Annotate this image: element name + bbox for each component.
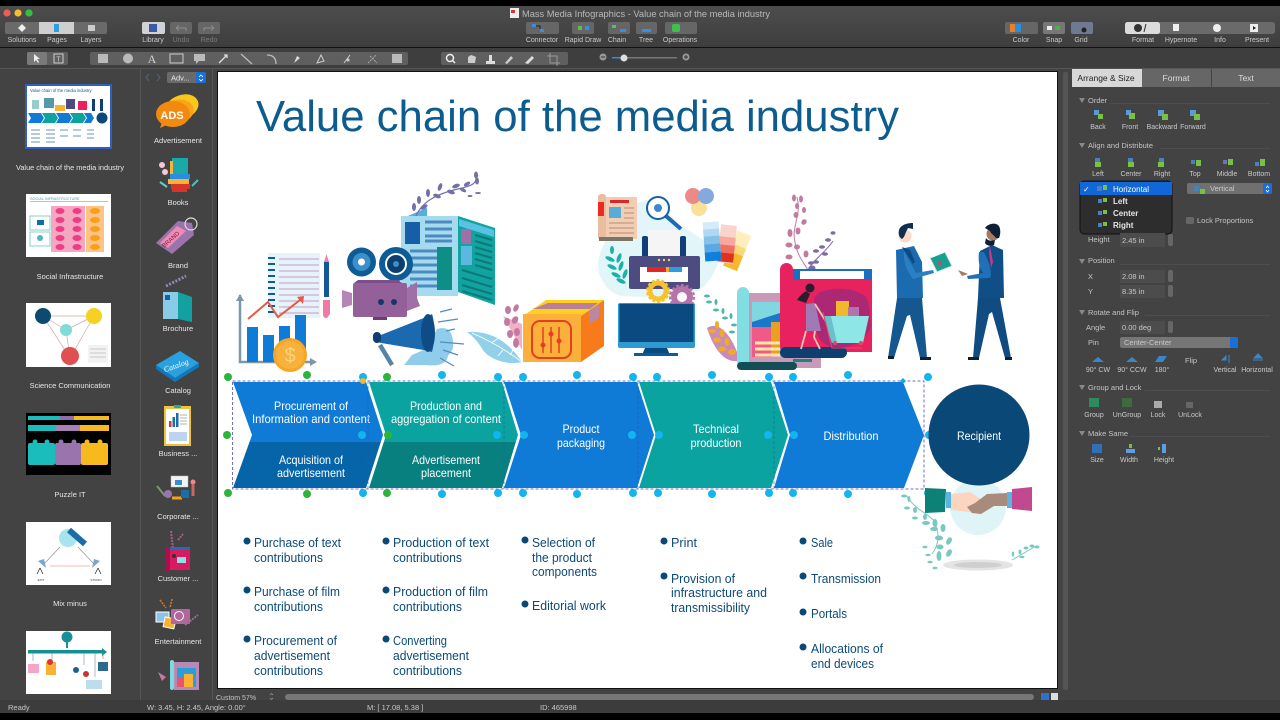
chevron: distribution: [774, 382, 924, 488]
connector and drawing mode buttons: Connector: [526, 37, 559, 44]
section: group and lock: Group: [1084, 412, 1104, 419]
illustration: two businessmen exchanging catalog: [888, 223, 1012, 360]
icon: brand: BRAND: [162, 231, 182, 250]
label: social infrastructure: Social Infrastructure: [37, 272, 103, 281]
segmented control: format hypernote info present: Info: [1214, 37, 1226, 44]
section: make same: Make Same: [1088, 429, 1128, 438]
thumbnail: value chain: [25, 84, 112, 149]
segmented control: format hypernote info present: Format: [1132, 37, 1154, 44]
connector and drawing mode buttons: Rapid Draw: [565, 37, 602, 44]
lock proportions: Lock Proportions: [1197, 216, 1254, 225]
horizontal distribute dropdown: Horizontal: [1113, 185, 1149, 194]
handshake illustration: [901, 479, 1040, 570]
section: rotate and flip: Vertical: [1214, 367, 1237, 374]
section: rotate and flip: Center-Center: [1124, 338, 1172, 347]
value chain group: [223, 371, 933, 498]
thumbnail: timeline: [26, 631, 111, 694]
section: make same: Width: [1120, 457, 1138, 464]
bullet list: procurement column: advertisement: [254, 649, 331, 663]
segmented control: format hypernote info present: Hypernote: [1165, 37, 1197, 44]
bullet list: procurement column: Procurement of: [254, 634, 337, 648]
document scrollbars: [216, 72, 1068, 702]
connector and drawing mode buttons: Operations: [663, 37, 698, 44]
cart: [823, 301, 869, 348]
panel: pages thumbnails: [0, 69, 141, 700]
document title: Mass Media Infographics - Value chain of the media industry: [522, 9, 770, 20]
sprigs above: [786, 194, 809, 272]
illustration: printer, monitor, colour swatches: [598, 188, 751, 356]
color snap grid buttons: Color: [1013, 37, 1030, 44]
horizontal distribute dropdown: Center: [1113, 209, 1138, 218]
section: group and lock: UnLock: [1178, 412, 1202, 419]
selection frame and handles: [223, 371, 933, 498]
thumbnail: mix minus: STUDIO: [90, 578, 102, 582]
colour circles: [685, 188, 714, 216]
label: mix minus: Mix minus: [53, 599, 87, 608]
small plant: [704, 294, 737, 361]
bullet list: procurement column: Purchase of text: [254, 536, 342, 550]
horizontal distribute dropdown: Left: [1113, 197, 1128, 206]
section: rotate and flip: 90° CCW: [1117, 366, 1147, 374]
status bar: [0, 700, 1280, 713]
color snap grid buttons: Grid: [1074, 37, 1088, 44]
section: order: Front: [1122, 124, 1138, 131]
section: order: Backward: [1147, 124, 1177, 131]
chevron: technical production: production: [690, 436, 742, 450]
library undo redo buttons: Undo: [173, 37, 189, 44]
bullet list: procurement column: contributions: [254, 664, 323, 678]
application title bar and main toolbar: [0, 6, 1280, 69]
section: align and distribute: Bottom: [1248, 171, 1270, 178]
section: group and lock: Group and Lock: [1088, 383, 1142, 392]
chevron: production and advertisement placement: aggregation of content: [391, 412, 502, 426]
printer: [629, 230, 700, 289]
section: position: X: [1088, 272, 1093, 281]
bullet list: production column: [382, 536, 490, 678]
chevron: procurement and acquisition: advertisement: [277, 466, 346, 480]
thumbnail: social infrastructure: [26, 194, 111, 257]
height field: Height: [1088, 235, 1111, 244]
section: position: Y: [1088, 287, 1093, 296]
connector and drawing mode buttons: [526, 22, 698, 44]
section: align and distribute: Align and Distribute: [1088, 141, 1153, 150]
icon: advertisement: ADS: [160, 110, 184, 122]
sprig: [412, 172, 481, 216]
bullet list: distribution column: end devices: [811, 657, 874, 671]
section: order: Forward: [1180, 124, 1206, 131]
magnifier: [647, 197, 681, 229]
drawing tool strip: [27, 52, 568, 66]
gears: [647, 280, 694, 309]
illustration: shopping catalog with plants: [704, 194, 872, 370]
bullet list: technical column: Print: [671, 536, 698, 550]
back page: [737, 287, 821, 370]
horizontal distribute dropdown: [1080, 181, 1172, 234]
icon: catalog: [156, 351, 199, 382]
label: books: Books: [168, 198, 189, 207]
segmented control: solutions pages layers: Layers: [80, 37, 102, 44]
color snap grid buttons: Snap: [1046, 37, 1062, 44]
inspector tabs: Arrange & Size: [1077, 73, 1135, 83]
chevron: production and advertisement placement: Production and: [410, 399, 482, 413]
section: rotate and flip: Pin: [1088, 338, 1099, 347]
section: position: 8.35 in: [1122, 287, 1145, 296]
title: Value chain of the media industry: [256, 92, 899, 141]
panel: drawing canvas: [217, 71, 1058, 689]
bullet list: production column: Production of text: [393, 536, 490, 550]
section: make same: [1079, 429, 1270, 464]
segmented control: format hypernote info present: Present: [1245, 37, 1269, 44]
segmented control: format hypernote info present: [1125, 22, 1275, 44]
shopper: [797, 284, 825, 349]
illustration: leaf and pink plant: [467, 303, 522, 363]
bullet list: procurement column: [244, 536, 342, 678]
section: group and lock: Lock: [1151, 412, 1166, 419]
icon: advertisement: [156, 90, 202, 128]
icon: business: [164, 405, 191, 446]
bullet list: packaging column: the product: [532, 551, 593, 565]
icon: dollar coin: $: [284, 345, 296, 367]
swatches: [703, 221, 751, 271]
bullet list: production column: advertisement: [393, 649, 470, 663]
section: rotate and flip: 0.00 deg: [1122, 323, 1151, 332]
chevron: production and advertisement placement: [369, 382, 518, 488]
section: group and lock: [1079, 383, 1270, 419]
section: rotate and flip: Horizontal: [1241, 367, 1273, 374]
section: align and distribute: Top: [1189, 171, 1201, 178]
sprigs: [901, 494, 1040, 569]
bullet list: packaging column: [522, 536, 607, 613]
chevron: distribution: Distribution: [824, 429, 878, 443]
section: align and distribute: Left: [1092, 171, 1104, 178]
bullet list: distribution column: Sale: [811, 536, 833, 550]
section: rotate and flip: Rotate and Flip: [1088, 308, 1139, 317]
bullet list: packaging column: components: [532, 565, 597, 579]
bullet list: procurement column: contributions: [254, 551, 323, 565]
drawing tool strip: A: [148, 52, 157, 66]
illustration: brochure with sprig: [401, 172, 495, 305]
label: entertainment: Entertainment: [155, 637, 202, 646]
recipient circle: Recipient: [957, 429, 1002, 443]
label: value chain: Value chain of the media industry: [16, 163, 124, 172]
man right: [958, 224, 1012, 360]
label: brand: Brand: [168, 261, 188, 270]
section: align and distribute: Right: [1154, 171, 1170, 178]
bullet list: distribution column: Allocations of: [811, 642, 883, 656]
status bar: W: 3.45, H: 2.45, Angle: 0.00°: [147, 703, 246, 712]
label: corporate: Corporate ...: [157, 512, 199, 521]
bullet list: packaging column: Editorial work: [532, 599, 607, 613]
label: customer: Customer ...: [158, 574, 198, 583]
chevron: product packaging: packaging: [557, 436, 605, 450]
thumbnail: puzzle IT: [26, 413, 111, 475]
chevron: production and advertisement placement: placement: [421, 466, 472, 480]
thumbnail: mix minus: EXIT: [38, 578, 44, 582]
section: position: 2.08 in: [1122, 272, 1145, 281]
icon: brochure: [163, 276, 192, 322]
illustration: megaphone: [373, 309, 464, 366]
bullet list: production column: contributions: [393, 551, 462, 565]
label: business: Business ...: [159, 449, 197, 458]
section: make same: Size: [1090, 457, 1104, 464]
horizontal distribute dropdown: ✓: [1083, 185, 1090, 194]
recipient circle: [928, 384, 1030, 486]
icon: catalog: Catalog: [162, 357, 190, 374]
section: align and distribute: Center: [1120, 171, 1142, 178]
bullet list: procurement column: Purchase of film: [254, 585, 340, 599]
panel: library shapes: [142, 69, 213, 700]
section: make same: Height: [1154, 457, 1174, 464]
illustration: parcel box: [523, 300, 604, 362]
section: order: [1079, 96, 1270, 131]
panel: arrange and size inspector: [1071, 69, 1280, 700]
thumbnail: value chain: Value chain of the media industry: [30, 88, 93, 93]
icon: next library item: [158, 660, 199, 690]
bullet list: technical column: infrastructure and: [671, 586, 767, 600]
vertical distribute select: [1187, 183, 1272, 194]
section: rotate and flip: Flip: [1185, 356, 1197, 365]
bullet list: production column: contributions: [393, 664, 462, 678]
section: rotate and flip: Angle: [1086, 323, 1105, 332]
bullet list: distribution column: Transmission: [811, 572, 881, 586]
window controls: [3, 9, 33, 17]
bullet list: production column: Production of film: [393, 585, 488, 599]
thumbnail: social infrastructure: SOCIAL INFRASTRUCTURE: [30, 197, 80, 201]
man left: [888, 223, 934, 360]
bullet list: production column: Converting: [393, 634, 447, 648]
thumbnail: mix minus: [26, 522, 111, 585]
bullet list: technical column: [660, 536, 767, 615]
label: puzzle IT: Puzzle IT: [54, 490, 86, 499]
label: advertisement: Advertisement: [154, 136, 203, 145]
section: align and distribute: [1079, 141, 1270, 178]
inspector tabs: Format: [1163, 73, 1190, 83]
segmented control: solutions pages layers: [5, 22, 107, 44]
vertical distribute select: Vertical: [1210, 184, 1235, 193]
document scrollbars: Custom 57%: [216, 695, 256, 702]
catalog exchanged: [930, 252, 952, 272]
label: science communication: Science Communication: [30, 381, 110, 390]
inspector tabs: Text: [1238, 73, 1254, 83]
bullet list: packaging column: Selection of: [532, 536, 596, 550]
horizontal distribute dropdown: Right: [1113, 221, 1134, 230]
chevron: procurement and acquisition: Acquisition of: [279, 453, 344, 467]
illustration: film camera: [342, 247, 420, 320]
section: group and lock: UnGroup: [1113, 412, 1141, 419]
status bar: M: [ 17.08, 5.38 ]: [367, 703, 423, 712]
zoom slider: [600, 54, 690, 62]
bullet list: technical column: transmissibility: [671, 601, 751, 615]
library undo redo buttons: [142, 22, 220, 44]
section: order: Back: [1090, 124, 1106, 131]
icon: customer: [166, 531, 190, 571]
segmented control: solutions pages layers: Solutions: [8, 37, 37, 44]
newspaper: [598, 194, 637, 241]
label: brochure: Brochure: [163, 324, 193, 333]
height field: [1088, 233, 1173, 247]
icon: entertainment: [156, 599, 198, 629]
chevron: procurement and acquisition: Information and content: [252, 412, 371, 426]
drawing tool strip: T: [56, 56, 61, 64]
teal sprig beside printer: [605, 246, 629, 285]
section: position: [1079, 256, 1270, 298]
library undo redo buttons: Redo: [201, 37, 217, 44]
bullet list: procurement column: contributions: [254, 600, 323, 614]
icon: corporate: [157, 476, 196, 498]
bullet list: distribution column: Portals: [811, 607, 847, 621]
section: rotate and flip: 90° CW: [1086, 366, 1110, 374]
icon: books: [159, 158, 198, 192]
section: rotate and flip: [1079, 308, 1273, 374]
bullet list: production column: contributions: [393, 600, 462, 614]
section: rotate and flip: 180°: [1155, 366, 1169, 374]
section: align and distribute: Middle: [1217, 171, 1237, 178]
thumbnail: science communication: [26, 303, 111, 367]
label: catalog: Catalog: [165, 386, 191, 395]
chevron: product packaging: Product: [562, 422, 600, 436]
status bar: Ready: [8, 703, 30, 712]
color snap grid buttons: [1005, 22, 1093, 44]
illustration: growth chart with notebook: [236, 253, 330, 372]
library navigation: Adv...: [171, 74, 190, 82]
status bar: ID: 465998: [540, 703, 577, 712]
height field: 2.45 in: [1122, 236, 1145, 245]
inspector tabs: [1072, 69, 1280, 87]
segmented control: solutions pages layers: Pages: [47, 37, 67, 44]
connector and drawing mode buttons: Tree: [639, 37, 653, 44]
chevron: production and advertisement placement: Advertisement: [412, 453, 481, 467]
chevron: product packaging: [504, 382, 654, 488]
connector and drawing mode buttons: Chain: [608, 37, 626, 44]
chevron: procurement and acquisition: Procurement of: [274, 399, 349, 413]
library undo redo buttons: Library: [142, 37, 164, 44]
section: order: Order: [1088, 96, 1108, 105]
section: position: Position: [1088, 256, 1115, 265]
chevron: technical production: [639, 382, 788, 488]
library navigation: [146, 72, 206, 83]
bullet list: distribution column: [800, 536, 883, 671]
chevron: technical production: Technical: [693, 422, 739, 436]
chevron: procurement and acquisition: [233, 382, 383, 488]
monitor: [618, 303, 695, 356]
icon: brand: [156, 218, 197, 254]
front page: [780, 263, 872, 358]
bullet list: technical column: Provision of: [671, 572, 736, 586]
